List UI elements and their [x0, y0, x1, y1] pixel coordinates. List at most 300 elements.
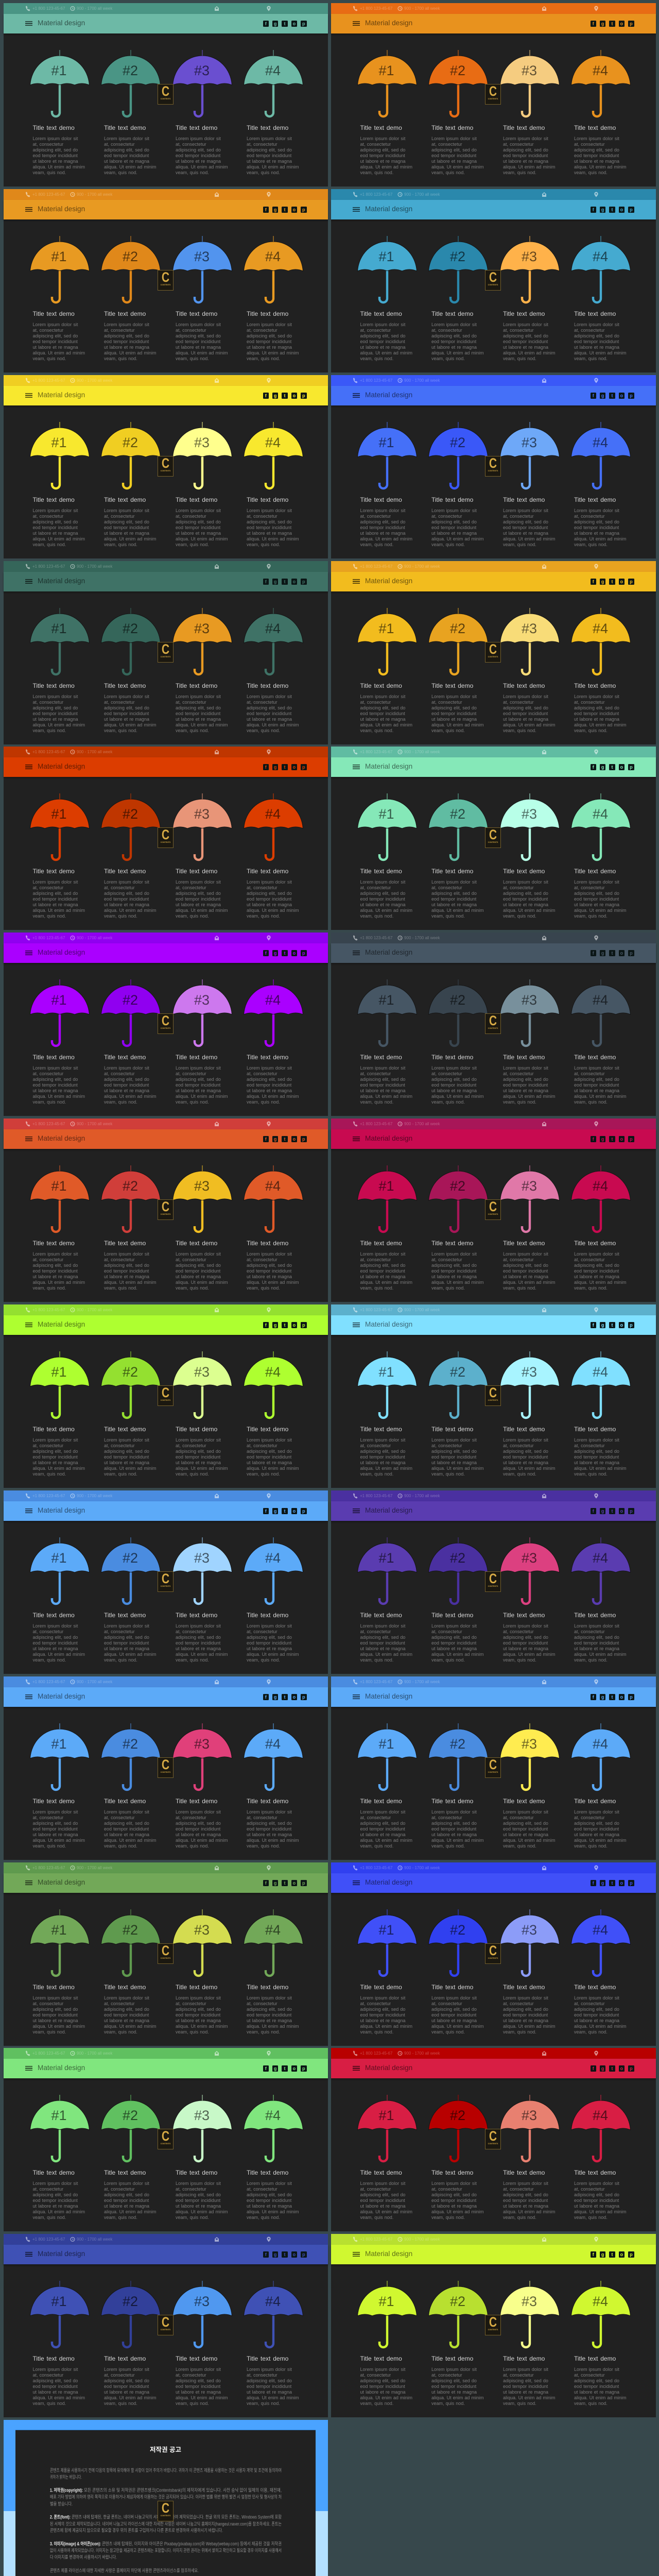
- badge: [158, 2315, 174, 2335]
- nav bar: f: [265, 2066, 267, 2071]
- umbrella #4: aliqua. Ut enim ad minim: [574, 350, 626, 355]
- umbrella #3: [173, 236, 232, 361]
- umbrella #3: aliqua. Ut enim ad minim: [176, 350, 228, 355]
- umbrella #1: Lorem ipsum dolor sit: [360, 1809, 405, 1815]
- umbrella #2: adipiscing elit, sed do: [431, 2006, 477, 2011]
- badge: CONTENTS: [161, 1213, 170, 1215]
- umbrella #2: aliqua. Ut enim ad minim: [431, 164, 483, 169]
- umbrella #3: [500, 422, 560, 547]
- umbrella #1: aliqua. Ut enim ad minim: [360, 1093, 412, 1098]
- umbrella #1: Lorem ipsum dolor sit: [33, 1065, 78, 1071]
- umbrella #3: adipiscing elit, sed do: [176, 1449, 221, 1454]
- umbrella #1: ut labore et re magna: [33, 1646, 78, 1651]
- umbrella #3: Lorem ipsum dolor sit: [176, 2367, 221, 2372]
- top bar: +1 800 123-45-67: [32, 1680, 65, 1684]
- umbrella #1: #1: [378, 992, 394, 1008]
- badge: CONTENTS: [161, 284, 170, 286]
- umbrella #1: [357, 793, 417, 919]
- umbrella #1: #1: [378, 1178, 394, 1194]
- nav bar: t: [612, 951, 613, 956]
- umbrella #4: veam, quis nod.: [247, 1099, 280, 1105]
- umbrella #2: at, consectetur: [431, 2187, 462, 2192]
- umbrella #2: adipiscing elit, sed do: [431, 2192, 477, 2197]
- umbrella #4: eod tempor incididunt: [247, 711, 291, 716]
- umbrella #2: at, consectetur: [104, 328, 135, 333]
- nav bar: f: [265, 207, 267, 212]
- umbrella #3: [171, 1351, 235, 1482]
- umbrella #4: ut labore et re magna: [247, 2203, 292, 2208]
- umbrella #2: adipiscing elit, sed do: [104, 1262, 149, 1267]
- badge: [158, 827, 174, 848]
- umbrella #4: aliqua. Ut enim ad minim: [247, 1465, 299, 1470]
- nav bar: Material design: [38, 762, 85, 770]
- umbrella #1: Lorem ipsum dolor sit: [360, 1995, 405, 2000]
- umbrella #2: [427, 1351, 491, 1482]
- umbrella #1: eod tempor incididunt: [33, 2198, 78, 2203]
- umbrella #2: aliqua. Ut enim ad minim: [431, 350, 483, 355]
- umbrella #1: ut labore et re magna: [360, 716, 405, 721]
- umbrella #3: Lorem ipsum dolor sit: [503, 693, 548, 699]
- umbrella #1: adipiscing elit, sed do: [360, 2192, 405, 2197]
- panel: blue and pink: [4, 1676, 328, 1860]
- umbrella #1: veam, quis nod.: [33, 727, 66, 733]
- umbrella #4: aliqua. Ut enim ad minim: [574, 1280, 626, 1285]
- umbrella #2: veam, quis nod.: [431, 1099, 465, 1105]
- nav bar: t: [612, 765, 613, 770]
- umbrella #3: at, consectetur: [176, 1815, 206, 1820]
- umbrella #1: eod tempor incididunt: [33, 2012, 78, 2018]
- umbrella #2: ut labore et re magna: [104, 2203, 149, 2208]
- umbrella #2: Lorem ipsum dolor sit: [104, 508, 149, 513]
- umbrella #2: adipiscing elit, sed do: [431, 519, 477, 524]
- umbrella #1: veam, quis nod.: [33, 355, 66, 361]
- umbrella #1: ut labore et re magna: [33, 1460, 78, 1465]
- umbrella #2: veam, quis nod.: [104, 913, 137, 918]
- umbrella #4: veam, quis nod.: [247, 2029, 280, 2034]
- nav bar: f: [593, 1323, 594, 1328]
- nav bar: o: [620, 1323, 623, 1328]
- nav bar: Material design: [38, 1134, 85, 1142]
- umbrella #2: #2: [123, 1364, 138, 1380]
- umbrella #1: Title text demo: [360, 682, 402, 689]
- nav bar: g: [601, 1323, 604, 1328]
- umbrella #4: at, consectetur: [247, 885, 278, 890]
- umbrella #1: #1: [51, 63, 67, 78]
- umbrella #4: aliqua. Ut enim ad minim: [247, 350, 299, 355]
- umbrella #3: veam, quis nod.: [176, 1285, 209, 1290]
- umbrella #1: Lorem ipsum dolor sit: [360, 693, 405, 699]
- umbrella #4: veam, quis nod.: [247, 727, 280, 733]
- umbrella #2: [427, 1723, 491, 1854]
- badge: CONTENTS: [161, 1585, 170, 1587]
- umbrella #3: eod tempor incididunt: [176, 2012, 220, 2018]
- umbrella #1: veam, quis nod.: [360, 2401, 393, 2406]
- umbrella #2: eod tempor incididunt: [431, 524, 476, 530]
- umbrella #4: adipiscing elit, sed do: [247, 2006, 292, 2011]
- umbrella #2: aliqua. Ut enim ad minim: [104, 1093, 156, 1098]
- umbrella #4: eod tempor incididunt: [247, 896, 291, 902]
- umbrella #1: aliqua. Ut enim ad minim: [33, 536, 85, 541]
- umbrella #4: [570, 1909, 634, 2040]
- umbrella #3: [173, 422, 232, 547]
- umbrella #4: at, consectetur: [574, 700, 605, 705]
- umbrella #2: at, consectetur: [431, 1071, 462, 1076]
- umbrella #3: aliqua. Ut enim ad minim: [176, 2209, 228, 2214]
- top bar: [4, 375, 328, 386]
- umbrella #3: veam, quis nod.: [503, 2029, 536, 2034]
- top bar: 900 - 1700 all week: [404, 1866, 440, 1870]
- umbrella #2: at, consectetur: [431, 1257, 462, 1262]
- umbrella #2: veam, quis nod.: [104, 727, 137, 733]
- umbrella #1: ut labore et re magna: [360, 902, 405, 907]
- umbrella #3: ut labore et re magna: [503, 1646, 548, 1651]
- umbrella #4: #4: [265, 1178, 281, 1194]
- umbrella #1: Title text demo: [33, 1612, 75, 1619]
- umbrella #3: veam, quis nod.: [503, 1099, 536, 1105]
- nav bar: p: [630, 207, 633, 212]
- nav bar: o: [293, 393, 296, 398]
- umbrella #4: ut labore et re magna: [247, 2389, 292, 2395]
- umbrella #3: [173, 608, 232, 733]
- badge: [158, 1943, 174, 1964]
- umbrella #1: veam, quis nod.: [33, 1843, 66, 1849]
- badge: [158, 270, 174, 291]
- umbrella #4: Lorem ipsum dolor sit: [574, 2367, 619, 2372]
- nav bar: Material design: [365, 1878, 412, 1886]
- umbrella #4: Title text demo: [574, 2169, 616, 2176]
- umbrella #2: adipiscing elit, sed do: [431, 2378, 477, 2383]
- umbrella #4: eod tempor incididunt: [574, 2198, 619, 2203]
- umbrella #4: Title text demo: [574, 868, 616, 875]
- badge: [485, 1385, 501, 1406]
- umbrella #2: #2: [450, 435, 465, 450]
- nav bar: [4, 1501, 328, 1521]
- umbrella #2: ut labore et re magna: [104, 716, 149, 721]
- top bar: +1 800 123-45-67: [360, 192, 392, 197]
- umbrella #4: at, consectetur: [574, 2372, 605, 2377]
- umbrella #3: Lorem ipsum dolor sit: [176, 1623, 221, 1628]
- umbrella #4: [570, 1723, 634, 1854]
- umbrella #3: Title text demo: [176, 868, 217, 875]
- umbrella #2: Title text demo: [104, 2169, 146, 2176]
- umbrella #2: #2: [450, 1736, 465, 1752]
- umbrella #1: #1: [51, 992, 67, 1008]
- umbrella #4: Title text demo: [247, 1798, 288, 1805]
- nav bar: f: [593, 2252, 594, 2257]
- notice text: [50, 2466, 282, 2576]
- nav bar: Material design: [38, 1506, 85, 1514]
- top bar: +1 800 123-45-67: [32, 2051, 65, 2056]
- umbrella #2: veam, quis nod.: [104, 1099, 137, 1105]
- badge: CONTENTS: [488, 98, 498, 100]
- nav bar: o: [620, 1509, 623, 1514]
- umbrella #3: eod tempor incididunt: [176, 2383, 220, 2388]
- umbrella #4: adipiscing elit, sed do: [247, 519, 292, 524]
- umbrella #4: Lorem ipsum dolor sit: [247, 1995, 292, 2000]
- umbrella #4: [570, 2094, 634, 2226]
- badge: CONTENTS: [488, 2143, 498, 2145]
- umbrella #2: ut labore et re magna: [104, 902, 149, 907]
- nav bar: Material design: [38, 1878, 85, 1886]
- badge: CONTENTS: [488, 1771, 498, 1773]
- nav bar: g: [274, 21, 276, 26]
- top bar: +1 800 123-45-67: [32, 1494, 65, 1498]
- nav bar: p: [630, 1880, 633, 1886]
- umbrella #1: ut labore et re magna: [33, 1274, 78, 1279]
- umbrella #3: aliqua. Ut enim ad minim: [503, 350, 555, 355]
- umbrella #3: veam, quis nod.: [503, 1285, 536, 1290]
- umbrella #2: Lorem ipsum dolor sit: [104, 1995, 149, 2000]
- umbrella #3: veam, quis nod.: [503, 1843, 536, 1849]
- umbrella #4: ut labore et re magna: [574, 531, 619, 536]
- umbrella #3: Title text demo: [503, 1984, 545, 1991]
- umbrella #4: eod tempor incididunt: [247, 1454, 291, 1459]
- umbrella #2: ut labore et re magna: [431, 902, 477, 907]
- nav bar: o: [293, 1137, 296, 1142]
- umbrella #1: Lorem ipsum dolor sit: [360, 321, 405, 327]
- umbrella #4: [244, 50, 303, 175]
- umbrella #3: Title text demo: [176, 496, 217, 503]
- umbrella #4: ut labore et re magna: [574, 159, 619, 164]
- umbrella #2: Lorem ipsum dolor sit: [431, 1251, 477, 1256]
- umbrella #4: Lorem ipsum dolor sit: [574, 1437, 619, 1443]
- umbrella #3: #3: [194, 621, 210, 636]
- umbrella #4: veam, quis nod.: [574, 2029, 608, 2034]
- umbrella #1: Title text demo: [33, 496, 75, 503]
- umbrella #4: eod tempor incididunt: [247, 1640, 291, 1646]
- top bar: +1 800 123-45-67: [32, 1122, 65, 1126]
- umbrella #4: ut labore et re magna: [247, 1646, 292, 1651]
- umbrella #2: veam, quis nod.: [104, 1285, 137, 1290]
- badge: CONTENTS: [488, 1213, 498, 1215]
- umbrella #3: eod tempor incididunt: [176, 1454, 220, 1459]
- umbrella #3: aliqua. Ut enim ad minim: [503, 1093, 555, 1098]
- umbrella #1: eod tempor incididunt: [360, 2383, 405, 2388]
- umbrella #3: adipiscing elit, sed do: [176, 2006, 221, 2011]
- nav bar: t: [284, 1137, 286, 1142]
- umbrella #2: at, consectetur: [104, 1071, 135, 1076]
- umbrella #1: veam, quis nod.: [33, 1657, 66, 1662]
- nav bar: o: [620, 579, 623, 584]
- top bar: [4, 2048, 328, 2059]
- umbrella #2: aliqua. Ut enim ad minim: [431, 908, 483, 913]
- nav bar: t: [284, 2252, 286, 2257]
- nav bar: p: [630, 2252, 633, 2257]
- umbrella #3: at, consectetur: [503, 1443, 534, 1448]
- umbrella #3: aliqua. Ut enim ad minim: [503, 2395, 555, 2400]
- umbrella #4: veam, quis nod.: [574, 727, 608, 733]
- umbrella #4: [571, 50, 631, 175]
- umbrella #2: [100, 1537, 164, 1668]
- umbrella #3: Title text demo: [503, 1054, 545, 1061]
- umbrella #1: ut labore et re magna: [360, 2018, 405, 2023]
- umbrella #2: Lorem ipsum dolor sit: [431, 136, 477, 141]
- top bar: [4, 1118, 328, 1129]
- umbrella #2: ut labore et re magna: [431, 1646, 477, 1651]
- umbrella #4: ut labore et re magna: [574, 344, 619, 349]
- umbrella #1: at, consectetur: [33, 513, 63, 518]
- umbrella #1: adipiscing elit, sed do: [360, 2378, 405, 2383]
- top bar: 900 - 1700 all week: [404, 1680, 440, 1684]
- umbrella #3: at, consectetur: [176, 2001, 206, 2006]
- badge: [158, 2501, 174, 2521]
- umbrella #3: [499, 1537, 563, 1668]
- umbrella #4: at, consectetur: [247, 700, 278, 705]
- top bar: +1 800 123-45-67: [360, 2237, 392, 2242]
- umbrella #4: at, consectetur: [247, 2372, 278, 2377]
- umbrella #3: #3: [194, 2108, 210, 2123]
- umbrella #4: at, consectetur: [247, 141, 278, 146]
- umbrella #3: #3: [522, 2294, 537, 2309]
- nav bar: g: [274, 765, 276, 770]
- umbrella #4: at, consectetur: [247, 513, 278, 518]
- umbrella #1: eod tempor incididunt: [33, 1454, 78, 1459]
- nav bar: [4, 1687, 328, 1707]
- umbrella #3: eod tempor incididunt: [503, 896, 548, 902]
- umbrella #2: veam, quis nod.: [104, 1843, 137, 1849]
- umbrella #2: ut labore et re magna: [431, 2389, 477, 2395]
- umbrella #4: veam, quis nod.: [247, 2214, 280, 2219]
- nav bar: p: [302, 765, 305, 770]
- umbrella #2: [101, 793, 161, 919]
- umbrella #1: at, consectetur: [360, 1443, 391, 1448]
- umbrella #2: #2: [123, 621, 138, 636]
- umbrella #2: aliqua. Ut enim ad minim: [104, 908, 156, 913]
- nav bar: f: [265, 1880, 267, 1886]
- top bar: [4, 189, 328, 200]
- umbrella #4: [244, 608, 303, 733]
- umbrella #3: ut labore et re magna: [503, 2018, 548, 2023]
- umbrella #3: Lorem ipsum dolor sit: [503, 1437, 548, 1443]
- umbrella #3: #3: [522, 806, 537, 822]
- umbrella #4: adipiscing elit, sed do: [247, 890, 292, 895]
- umbrella #1: [29, 2280, 93, 2412]
- umbrella #4: aliqua. Ut enim ad minim: [574, 722, 626, 727]
- umbrella #1: [29, 1723, 93, 1854]
- umbrella #1: adipiscing elit, sed do: [33, 333, 78, 338]
- umbrella #1: adipiscing elit, sed do: [33, 1077, 78, 1082]
- umbrella #1: eod tempor incididunt: [360, 339, 405, 344]
- umbrella #1: at, consectetur: [33, 328, 63, 333]
- nav bar: t: [612, 1509, 613, 1514]
- umbrella #3: at, consectetur: [503, 1071, 534, 1076]
- top bar: +1 800 123-45-67: [360, 1680, 392, 1684]
- top bar: +1 800 123-45-67: [32, 378, 65, 383]
- umbrella #3: ut labore et re magna: [176, 1832, 221, 1837]
- umbrella #3: Title text demo: [503, 1426, 545, 1433]
- umbrella #1: aliqua. Ut enim ad minim: [33, 350, 85, 355]
- umbrella #3: ut labore et re magna: [503, 1832, 548, 1837]
- umbrella #3: eod tempor incididunt: [176, 1082, 220, 1087]
- umbrella #2: at, consectetur: [431, 141, 462, 146]
- umbrella #4: [570, 1165, 634, 1296]
- umbrella #3: aliqua. Ut enim ad minim: [176, 1280, 228, 1285]
- top bar: 900 - 1700 all week: [404, 936, 440, 940]
- umbrella #4: Lorem ipsum dolor sit: [574, 1809, 619, 1815]
- panel: sky blue: [331, 189, 656, 372]
- umbrella #2: Title text demo: [431, 310, 473, 317]
- umbrella #1: ut labore et re magna: [360, 1832, 405, 1837]
- umbrella #2: [100, 1351, 164, 1482]
- umbrella #3: Title text demo: [176, 682, 217, 689]
- umbrella #4: at, consectetur: [574, 885, 605, 890]
- umbrella #2: veam, quis nod.: [104, 2401, 137, 2406]
- umbrella #4: Title text demo: [574, 1798, 616, 1805]
- umbrella #3: Title text demo: [503, 1612, 545, 1619]
- umbrella #3: veam, quis nod.: [503, 355, 536, 361]
- umbrella #4: [570, 979, 634, 1110]
- umbrella #1: [30, 793, 90, 919]
- nav bar: t: [284, 393, 286, 398]
- umbrella #2: at, consectetur: [431, 700, 462, 705]
- badge: CONTENTS: [161, 1399, 170, 1401]
- umbrella #2: veam, quis nod.: [104, 2029, 137, 2034]
- umbrella #3: [171, 979, 235, 1110]
- umbrella #4: at, consectetur: [247, 2001, 278, 2006]
- nav bar: p: [630, 579, 633, 584]
- umbrella #3: [499, 979, 563, 1110]
- umbrella #2: [428, 793, 488, 919]
- umbrella #3: adipiscing elit, sed do: [176, 147, 221, 152]
- umbrella #4: aliqua. Ut enim ad minim: [574, 1652, 626, 1657]
- umbrella #2: Title text demo: [104, 2355, 146, 2362]
- umbrella #4: adipiscing elit, sed do: [574, 147, 619, 152]
- umbrella #3: eod tempor incididunt: [503, 2383, 548, 2388]
- panel: chartreuse: [331, 2234, 656, 2417]
- badge: CONTENTS: [161, 2329, 170, 2331]
- umbrella #1: aliqua. Ut enim ad minim: [33, 1280, 85, 1285]
- umbrella #4: #4: [593, 249, 608, 264]
- umbrella #1: adipiscing elit, sed do: [33, 2192, 78, 2197]
- umbrella #1: eod tempor incididunt: [360, 1640, 405, 1646]
- umbrella #1: adipiscing elit, sed do: [360, 1821, 405, 1826]
- umbrella #3: at, consectetur: [503, 2187, 534, 2192]
- umbrella #1: aliqua. Ut enim ad minim: [33, 722, 85, 727]
- umbrella #4: eod tempor incididunt: [574, 2383, 619, 2388]
- top bar: 900 - 1700 all week: [77, 1866, 112, 1870]
- umbrella #4: adipiscing elit, sed do: [247, 1077, 292, 1082]
- umbrella #1: at, consectetur: [33, 1257, 63, 1262]
- top bar: +1 800 123-45-67: [360, 1866, 392, 1870]
- badge: CONTENTS: [161, 2143, 170, 2145]
- nav bar: t: [284, 1694, 286, 1700]
- umbrella #3: veam, quis nod.: [503, 2401, 536, 2406]
- umbrella #1: adipiscing elit, sed do: [33, 1634, 78, 1639]
- umbrella #2: #2: [123, 1736, 138, 1752]
- top bar: 900 - 1700 all week: [404, 1308, 440, 1312]
- nav bar: Material design: [38, 2064, 85, 2072]
- umbrella #2: at, consectetur: [431, 2372, 462, 2377]
- umbrella #1: Title text demo: [360, 124, 402, 131]
- umbrella #2: Lorem ipsum dolor sit: [431, 508, 477, 513]
- top bar: 900 - 1700 all week: [77, 2051, 112, 2056]
- umbrella #3: Lorem ipsum dolor sit: [176, 1251, 221, 1256]
- umbrella #3: Lorem ipsum dolor sit: [503, 1251, 548, 1256]
- umbrella #1: eod tempor incididunt: [33, 152, 78, 158]
- umbrella #1: aliqua. Ut enim ad minim: [360, 536, 412, 541]
- top bar: 900 - 1700 all week: [77, 378, 112, 383]
- umbrella #2: at, consectetur: [104, 513, 135, 518]
- umbrella #4: adipiscing elit, sed do: [574, 1449, 619, 1454]
- nav bar: t: [612, 579, 613, 584]
- umbrella #2: #2: [123, 806, 138, 822]
- umbrella #2: #2: [450, 249, 465, 264]
- umbrella #1: adipiscing elit, sed do: [360, 705, 405, 710]
- umbrella #1: at, consectetur: [33, 2001, 63, 2006]
- umbrella #1: [29, 2094, 93, 2226]
- umbrella #3: at, consectetur: [503, 141, 534, 146]
- umbrella #2: at, consectetur: [104, 1443, 135, 1448]
